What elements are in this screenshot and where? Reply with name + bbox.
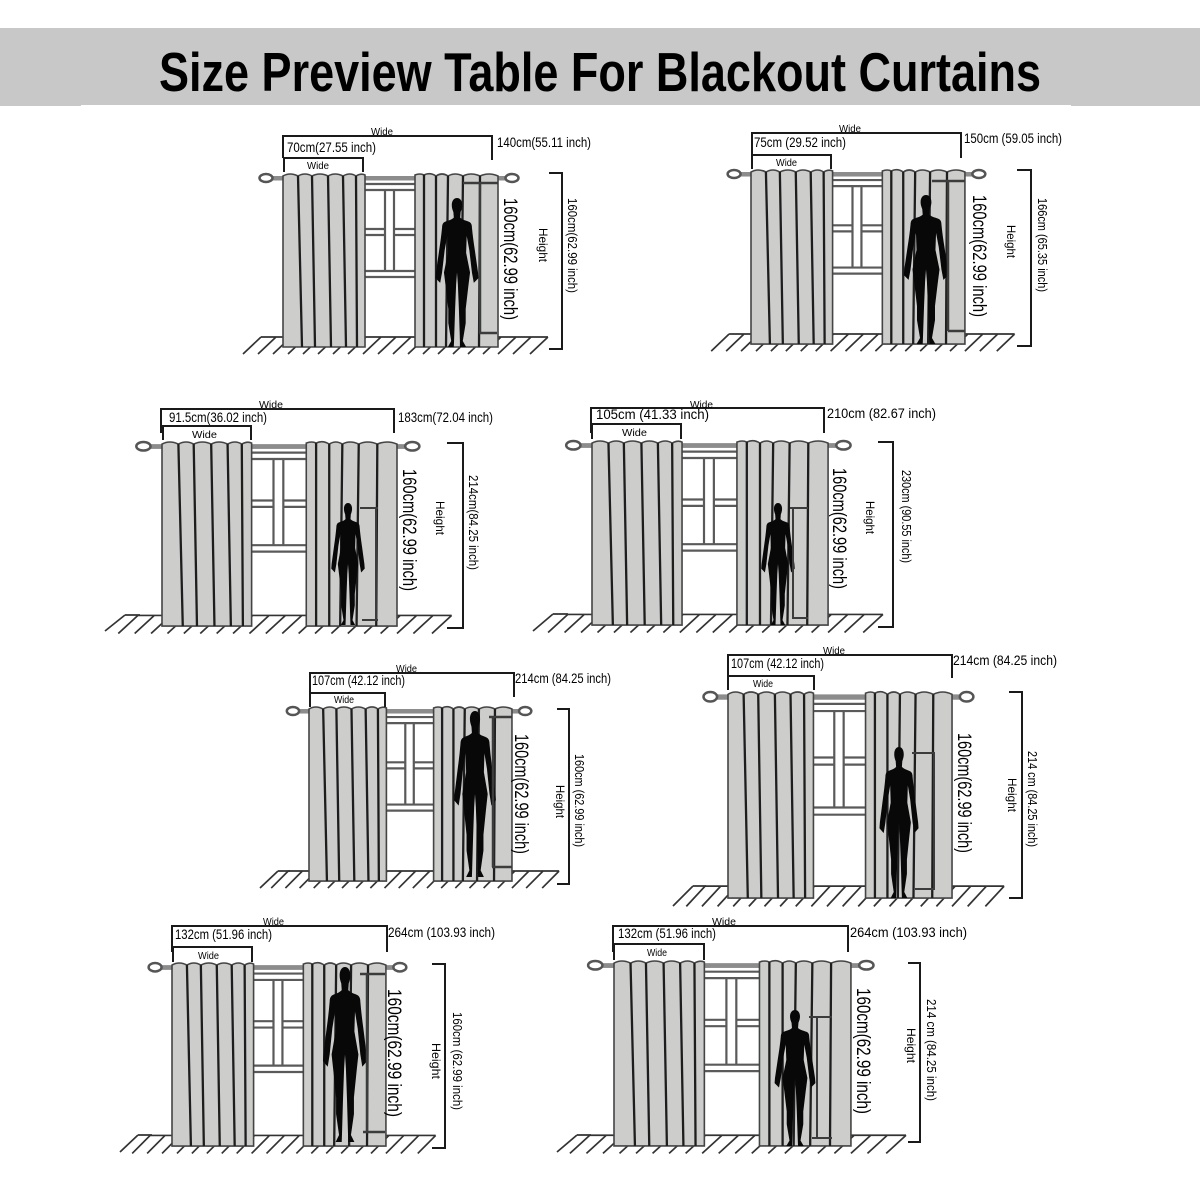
total width value: 264cm (103.93 inch) <box>388 925 495 940</box>
panel: 210cm x 230cm <box>533 399 936 633</box>
160cm reference bar <box>489 717 512 867</box>
total width bracket <box>161 409 394 433</box>
human silhouette <box>454 711 496 877</box>
total width bracket <box>172 926 387 952</box>
curtain drawing <box>570 961 906 1153</box>
human silhouette <box>761 503 795 625</box>
height label: Height <box>1005 778 1019 813</box>
height bracket <box>549 173 562 349</box>
panel: 183cm x 214cm <box>105 399 493 634</box>
total wide label: Wide <box>263 916 284 928</box>
panel width value: 70cm(27.55 inch) <box>287 140 376 155</box>
human silhouette <box>331 503 365 625</box>
160cm reference bar <box>932 181 965 331</box>
curtain height value: 160cm (62.99 inch) <box>572 754 587 847</box>
panel wide label: Wide <box>198 950 219 962</box>
curtain drawing <box>686 692 1004 906</box>
total wide label: Wide <box>823 645 845 657</box>
panel wide label: Wide <box>622 427 647 439</box>
total width value: 214cm (84.25 inch) <box>515 671 611 686</box>
height label: Height <box>429 1043 443 1080</box>
height bracket <box>1017 170 1031 346</box>
160cm reference bar <box>809 1017 832 1138</box>
curtain drawing <box>243 174 548 354</box>
panel: 214cm x 214cm <box>673 645 1057 906</box>
panel width bracket <box>728 676 814 690</box>
height bracket <box>878 442 893 627</box>
total wide label: Wide <box>396 663 417 675</box>
160cm reference bar <box>360 974 385 1132</box>
panel width bracket <box>614 944 704 960</box>
human silhouette <box>323 967 367 1142</box>
human silhouette <box>904 195 948 344</box>
160cm reference bar <box>463 183 498 333</box>
panel wide label: Wide <box>334 694 354 706</box>
person height value: 160cm(62.99 inch) <box>499 198 520 320</box>
panel wide label: Wide <box>776 157 797 169</box>
person height value: 160cm(62.99 inch) <box>828 468 849 589</box>
curtain drawing <box>118 442 452 634</box>
panel width value: 91.5cm(36.02 inch) <box>169 410 267 425</box>
panel width bracket <box>752 155 831 169</box>
total width value: 150cm (59.05 inch) <box>964 131 1062 146</box>
panel wide label: Wide <box>192 429 217 441</box>
curtain height value: 230cm (90.55 inch) <box>899 470 914 563</box>
total wide label: Wide <box>712 916 736 928</box>
panel wide label: Wide <box>307 160 329 172</box>
total width bracket <box>752 133 961 158</box>
panel wide label: Wide <box>647 947 667 959</box>
curtain drawing <box>271 707 559 888</box>
height label: Height <box>433 501 447 536</box>
total wide label: Wide <box>371 126 393 138</box>
total width bracket <box>613 926 848 952</box>
panel width value: 105cm (41.33 inch) <box>596 407 709 422</box>
person height value: 160cm(62.99 inch) <box>383 989 404 1117</box>
total width value: 214cm (84.25 inch) <box>953 653 1057 668</box>
height bracket <box>432 964 445 1148</box>
total width value: 264cm (103.93 inch) <box>850 925 967 940</box>
height label: Height <box>863 501 877 535</box>
total wide label: Wide <box>259 399 283 411</box>
curtain height value: 160cm (62.99 inch) <box>450 1012 465 1110</box>
160cm reference bar <box>360 508 378 620</box>
person height value: 160cm(62.99 inch) <box>852 988 873 1114</box>
height bracket <box>1009 692 1022 898</box>
total width bracket <box>728 655 952 690</box>
curtain height value: 160cm(62.99 inch) <box>565 198 580 293</box>
curtain height value: 214cm(84.25 inch) <box>466 475 481 570</box>
panel: 264cm x 214cm <box>557 916 967 1153</box>
total width bracket <box>591 408 824 433</box>
height label: Height <box>904 1028 918 1064</box>
height label: Height <box>1004 225 1018 259</box>
curtain drawing <box>711 170 1015 351</box>
total width value: 210cm (82.67 inch) <box>827 406 936 421</box>
panel: 150cm x 166cm <box>711 123 1062 351</box>
panel width bracket <box>163 426 251 440</box>
height bracket <box>447 443 463 628</box>
title band <box>0 28 1200 106</box>
total width bracket <box>283 136 492 160</box>
panel: 214cm x 160cm <box>260 663 611 888</box>
panel width bracket <box>173 947 252 962</box>
curtain drawing <box>548 441 883 633</box>
total width value: 183cm(72.04 inch) <box>398 410 493 425</box>
panel width value: 75cm (29.52 inch) <box>754 135 846 150</box>
total wide label: Wide <box>690 399 713 411</box>
panel width value: 107cm (42.12 inch) <box>312 673 405 688</box>
total wide label: Wide <box>839 123 861 135</box>
height bracket <box>908 963 920 1142</box>
person height value: 160cm(62.99 inch) <box>398 469 419 591</box>
human silhouette <box>775 1010 815 1146</box>
curtain height value: 214 cm (84.25 inch) <box>1025 751 1040 847</box>
human silhouette <box>879 747 919 898</box>
height label: Height <box>536 228 550 263</box>
panel width bracket <box>284 158 363 172</box>
total width value: 140cm(55.11 inch) <box>497 135 591 150</box>
total width bracket <box>310 673 514 707</box>
curtain height value: 214 cm (84.25 inch) <box>924 999 939 1101</box>
person height value: 160cm(62.99 inch) <box>510 734 531 854</box>
person height value: 160cm(62.99 inch) <box>953 733 974 853</box>
panel wide label: Wide <box>753 678 773 690</box>
curtain height value: 166cm (65.35 inch) <box>1035 198 1050 292</box>
panel width value: 132cm (51.96 inch) <box>175 927 272 942</box>
panel: 264cm x 160cm <box>120 916 495 1153</box>
160cm reference bar <box>790 508 808 619</box>
panel width value: 107cm (42.12 inch) <box>731 656 824 671</box>
160cm reference bar <box>912 753 935 890</box>
height label: Height <box>553 785 567 819</box>
panel width value: 132cm (51.96 inch) <box>618 926 716 941</box>
panel width bracket <box>592 424 681 439</box>
panel: 140cm x 160cm <box>243 126 591 354</box>
curtain drawing <box>132 963 436 1153</box>
person height value: 160cm(62.99 inch) <box>968 195 989 317</box>
panel width bracket <box>310 693 385 707</box>
human silhouette <box>436 198 478 347</box>
height bracket <box>557 709 569 884</box>
